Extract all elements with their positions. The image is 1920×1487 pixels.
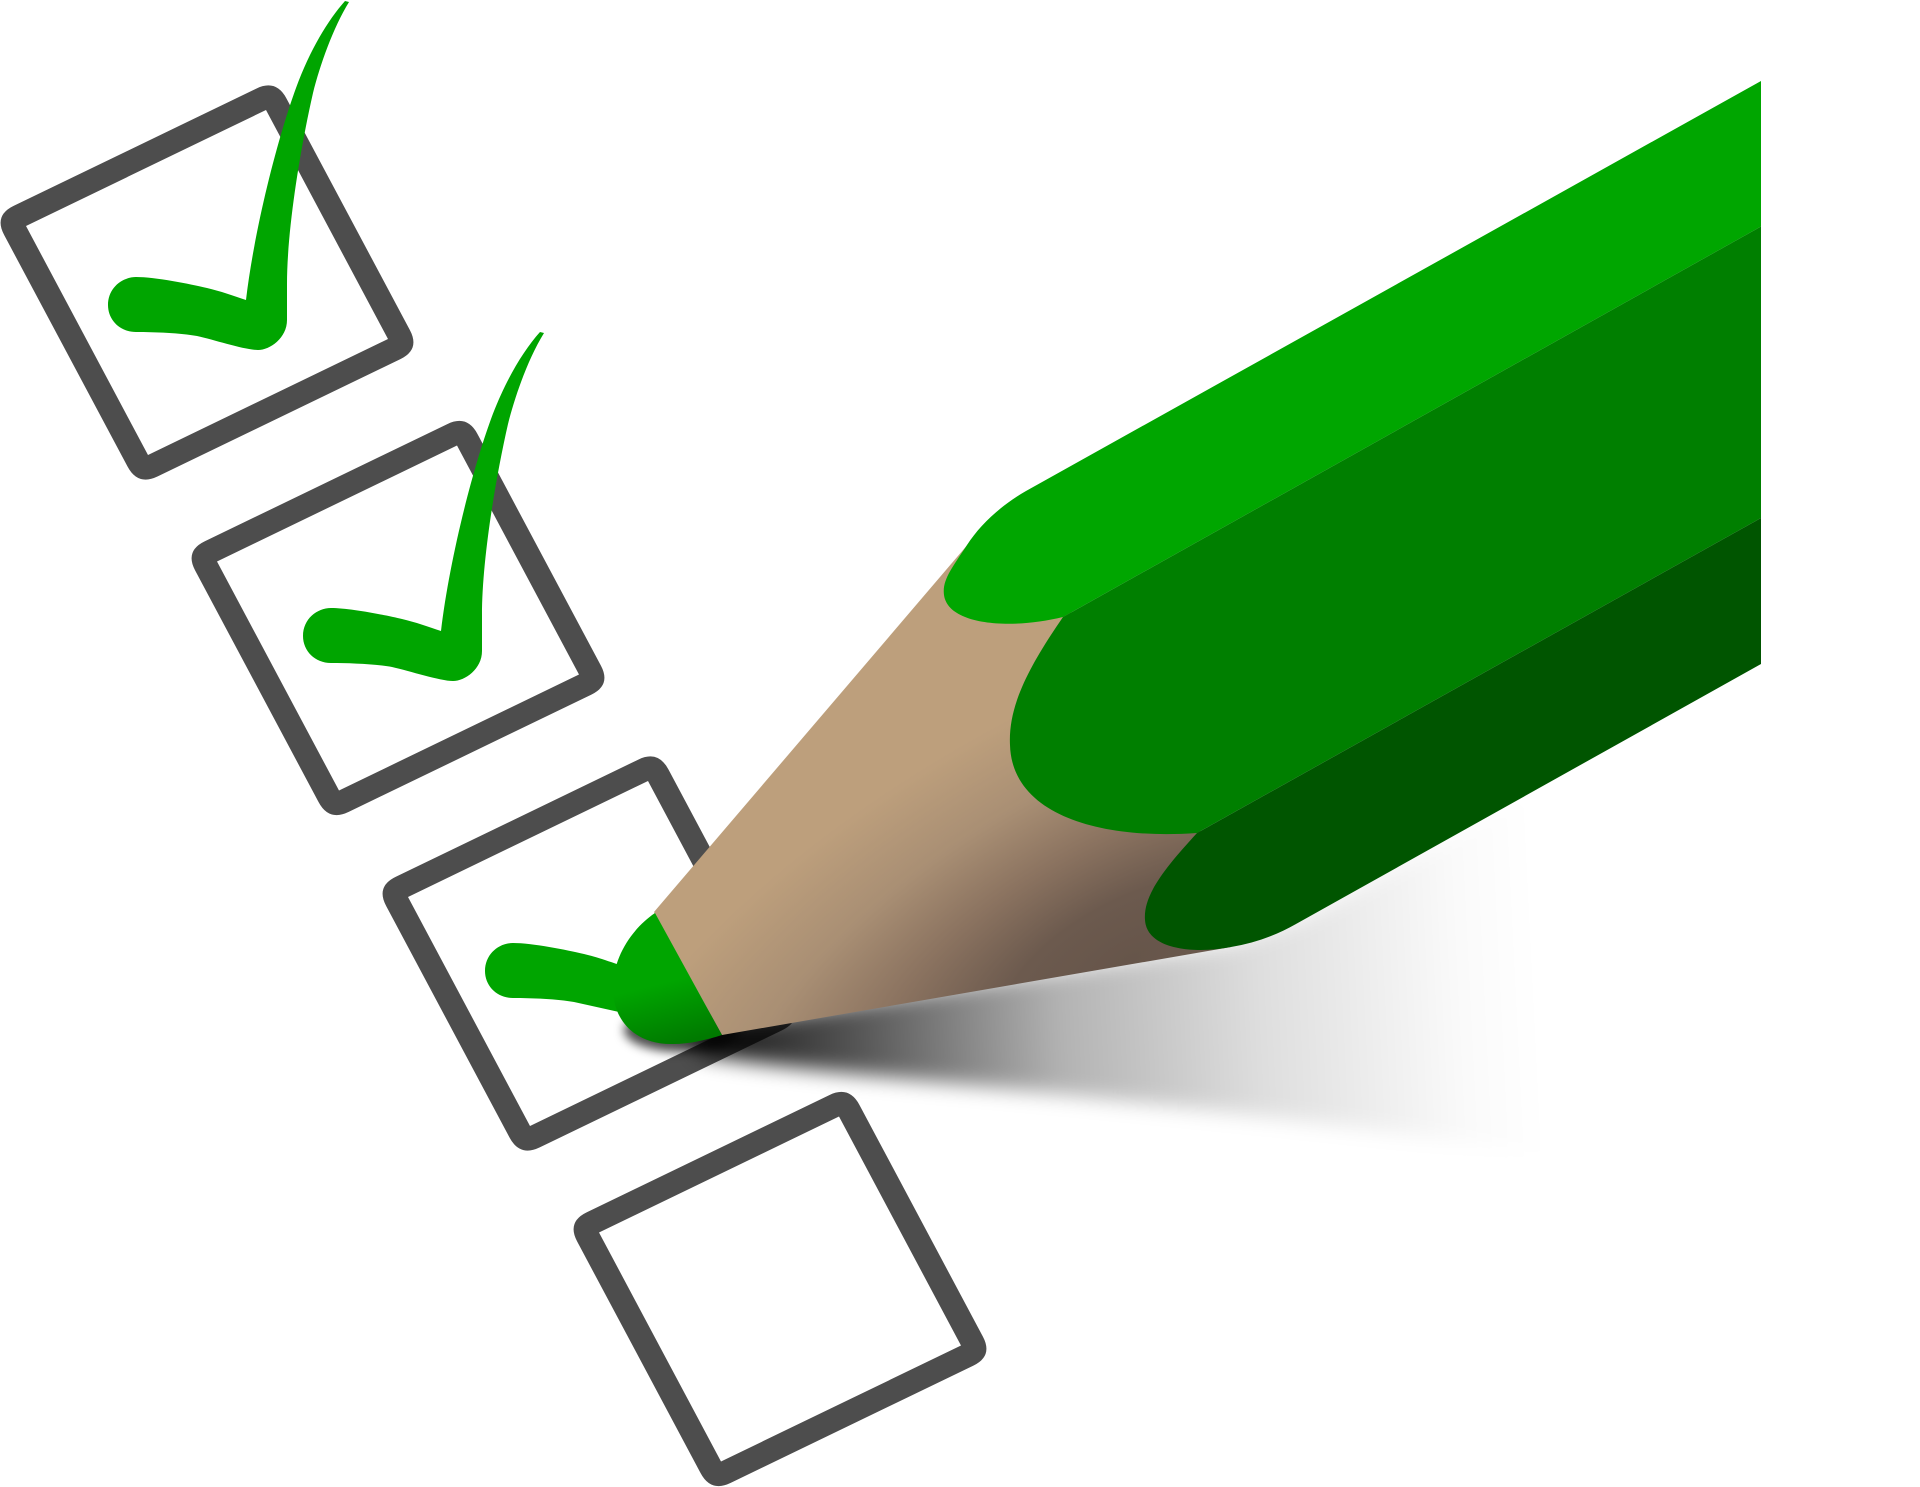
checkbox 4	[574, 1092, 986, 1486]
pencil: dark green band	[1145, 518, 1761, 950]
pencil: wood cone	[654, 536, 1231, 1035]
checkbox 1	[1, 85, 413, 480]
pencil	[613, 81, 1761, 1044]
pencil shadow	[624, 770, 1600, 1158]
pencil: mid green band	[1010, 226, 1761, 834]
pencil: light green band	[944, 81, 1761, 624]
check mark 2	[303, 332, 544, 681]
checkbox 3	[383, 756, 795, 1151]
check mark 1	[108, 1, 349, 350]
checkbox 2	[192, 421, 604, 815]
pencil: lead tip	[613, 913, 722, 1044]
check mark 3: partial stroke	[485, 943, 637, 1016]
